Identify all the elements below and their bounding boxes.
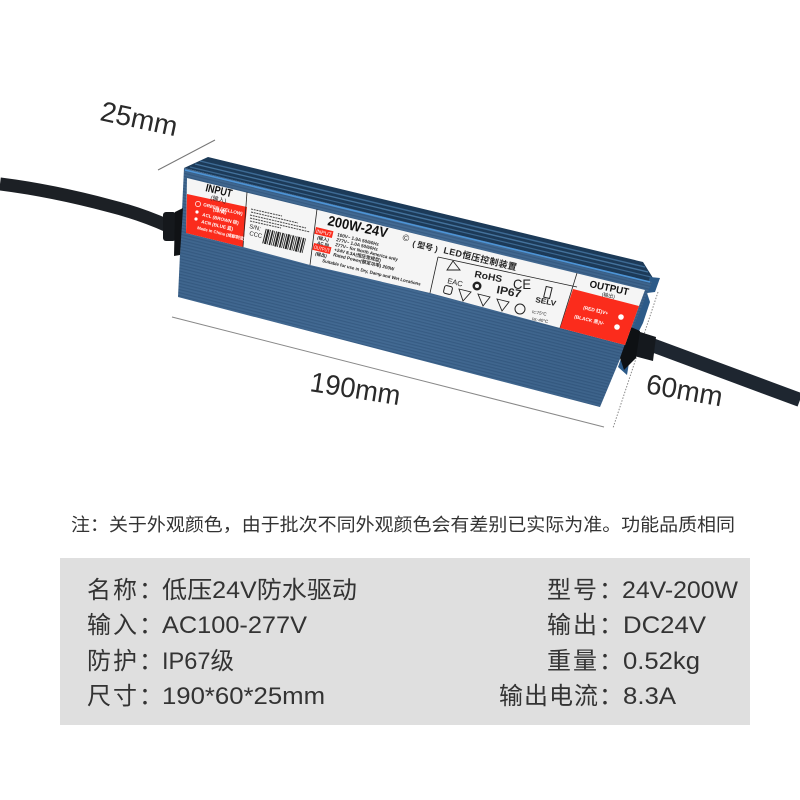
dimension label: 190mm: 190mm — [308, 366, 403, 411]
label text: electrical specs: 100V~ 1.9A 50/60Hz — [337, 232, 380, 247]
dimension line: 60mm — [613, 292, 658, 428]
label text: input wiring: ACN (BLUE 蓝) — [201, 218, 234, 232]
label text: input wiring: ACL (BROWN 棕) — [202, 211, 240, 227]
spec: protection: IP67级 — [162, 648, 234, 675]
label text: input wiring: GREEN (YELLOW) — [203, 202, 244, 216]
spec: size — [87, 683, 325, 710]
symbol: UL mark — [472, 282, 482, 290]
spec: name: 名称： — [87, 577, 163, 604]
label: input tag — [314, 227, 334, 238]
dimension line: 25mm — [158, 140, 215, 170]
product: LED driver — [163, 157, 660, 407]
label text: electrical specs: +24V 8.3A(恒压常规型) — [334, 246, 382, 264]
spec: output: DC24V — [623, 612, 706, 639]
label: white sticker — [186, 178, 645, 345]
symbol: temperature ratings: ta:-40°C — [532, 316, 549, 324]
spec: output — [547, 612, 706, 639]
symbol: SELV: SELV — [535, 295, 557, 308]
dimension label: 25mm: 25mm — [98, 96, 180, 142]
label: certification symbols — [443, 261, 557, 324]
label text: tag captions: (输入) — [317, 234, 330, 244]
label text: electrical specs: Rated Power(额定功率) 200W — [333, 251, 396, 273]
label: input tag: INPUT — [315, 229, 332, 238]
label text: input wiring — [194, 201, 246, 243]
spec: input: 输入： — [87, 612, 163, 639]
label text: serial number: CCC — [249, 231, 263, 240]
label: output tag: OUTPUT — [313, 245, 330, 254]
top cooling fins — [184, 157, 653, 282]
label: output tag — [312, 243, 332, 254]
cable: output — [652, 345, 800, 400]
spec: size: 190*60*25mm — [162, 683, 325, 710]
symbol: outline marks — [443, 285, 552, 314]
spec: weight: 0.52kg — [623, 648, 700, 675]
note text: 注：关于外观颜色，由于批次不同外观颜色会有差别已实际为准。功能品质相同 — [71, 515, 735, 535]
spec: input — [87, 612, 307, 639]
spec: input: AC100-277V — [162, 612, 307, 639]
symbol: triangles — [447, 261, 509, 311]
label text: input: (输入) — [210, 194, 227, 205]
label text: input: INPUT — [204, 182, 234, 200]
spec: output: 输出： — [547, 612, 623, 639]
spec: name: 低压24V防水驱动 — [162, 577, 357, 604]
symbol: CE: CE — [513, 276, 531, 292]
label text: output: OUTPUT — [588, 279, 630, 298]
spec: protection — [87, 648, 234, 675]
blue edge highlight — [185, 170, 650, 282]
spec: model — [547, 577, 738, 604]
label text: model line: ( 型号 ) — [412, 238, 439, 254]
label: output red block — [560, 289, 639, 345]
label text: tag captions: (输出) — [315, 250, 328, 260]
label text: electrical specs — [322, 232, 422, 287]
right grommet — [620, 327, 656, 370]
barcode — [264, 236, 305, 246]
label text: serial number: S/N: — [249, 224, 262, 233]
front housing — [178, 168, 652, 407]
left grommet — [163, 208, 183, 256]
label text: output wiring: (BLACK 黑)V- — [574, 314, 605, 327]
spec: name — [87, 577, 357, 604]
symbol: IP67: IP67 — [495, 284, 522, 301]
label text: input wiring: (绿/黄) — [213, 206, 228, 216]
label text: tag captions: AC IN — [317, 240, 330, 248]
symbol: EAC: EAC — [447, 276, 464, 289]
dimension line: 190mm — [172, 317, 604, 427]
label text: input — [203, 182, 234, 206]
spec: size: 尺寸： — [87, 683, 163, 710]
label: input red block — [186, 194, 247, 247]
housing shading — [178, 168, 652, 407]
spec: protection: 防护： — [87, 648, 163, 675]
symbol: temperature ratings — [532, 309, 549, 324]
symbol: RoHS: RoHS — [473, 269, 503, 285]
dimension label: 60mm: 60mm — [644, 368, 725, 412]
right end flange — [618, 277, 660, 375]
label: certification mark: © — [402, 232, 411, 244]
label text: LED product name: LED恒压控制装置 — [443, 244, 518, 272]
spec: output current: 8.3A — [623, 683, 676, 710]
label text: serial number — [249, 224, 263, 240]
spec: model: 24V-200W — [622, 577, 738, 604]
label text: tag captions — [315, 234, 330, 260]
label text: electrical specs: 277V~ for North America only — [335, 242, 399, 262]
spec: output current: 输出电流： — [499, 683, 623, 710]
label text: output wiring — [574, 304, 624, 330]
spec: model: 型号： — [547, 577, 623, 604]
panel: specifications — [60, 558, 750, 725]
label text: input wiring: Made in China (成都制造) — [197, 224, 246, 243]
label text: electrical specs: Suitable for use in Dry, Damp and Wet Locations — [322, 258, 422, 287]
label text: fine print — [250, 209, 310, 232]
label: sticker dividers — [243, 192, 577, 328]
label text: output wiring: (RED 红)V+ — [583, 304, 609, 317]
spec: weight: 重量： — [547, 648, 623, 675]
label text: electrical specs: 277V~ 1.0A 50/60Hz — [336, 237, 379, 252]
spec: weight — [547, 648, 700, 675]
symbol: temperature ratings: tc:75°C — [532, 309, 547, 317]
label heading: 200W-24V: 200W-24V — [326, 212, 390, 241]
label text: output: (输出) — [601, 291, 616, 301]
cable: input — [0, 184, 168, 226]
